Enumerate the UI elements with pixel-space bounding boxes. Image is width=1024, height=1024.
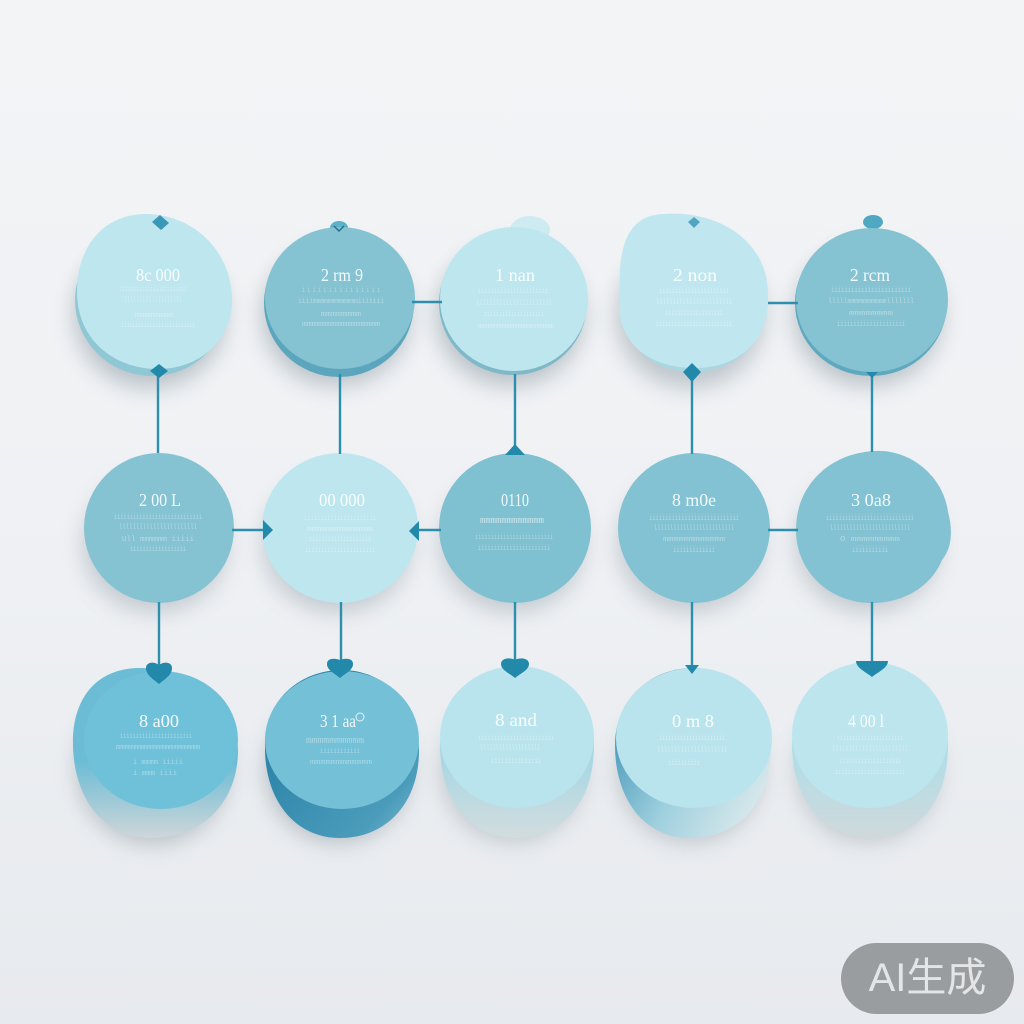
- node: row 1 column 3: iiiiiiiiiiiiiiiiiiiiii: [478, 288, 548, 296]
- node: row 1 column 3: 1 nan: [495, 265, 535, 285]
- node: row 1 column 2: [262, 221, 415, 386]
- node: row 2 column 1: lllllllllllllllllllllll: [119, 524, 197, 532]
- node: row 1 column 4: iiiiiiiiiiiiiiiiiiiiiiiii: [656, 321, 732, 329]
- node: row 2 column 4: iiiiiiiiiiiii: [673, 547, 715, 555]
- arrow: row 1 column 5 down: [866, 372, 878, 452]
- node: row 1 column 4: lllllllllllllllllllllll: [656, 299, 732, 307]
- arrow: row 1 column 2 down: [339, 374, 341, 454]
- node: row 1 column 5: [794, 215, 948, 386]
- node: row 1 column 5: mmmmmmmm: [849, 310, 893, 318]
- node: row 1 column 3: iiiiiiiiiiiiiiiiiiii: [484, 311, 544, 319]
- node: row 2 column 1: Ull mmmmmm iiiii: [122, 536, 194, 544]
- node: row 3 column 5: iiiiiiiiiiiiiiiiiiii: [839, 758, 901, 766]
- arrow: row 2 column 4 to 5: [768, 529, 798, 531]
- node: row 3 column 5: iiiiiiiiiiiiiiiiiiiiii: [835, 769, 905, 777]
- node: row 3 column 3: lllllllllllllllllll: [480, 745, 540, 753]
- node: row 3 column 5: 4 00 l: [848, 711, 884, 731]
- node: row 3 column 4: iiiiiiiiiiiiiiiiiiiiii: [659, 735, 725, 743]
- connector lines and arrows: [146, 215, 888, 684]
- node: row 3 column 4: 0 m 8: [672, 711, 714, 731]
- node: row 2 column 2: iiiiiiiiiiiiiiiiiiiiii: [305, 547, 375, 555]
- node: row 3 column 3: [440, 666, 594, 842]
- arrow: row 1 column 1 top marker: [152, 215, 169, 230]
- node: row 1 column 5: lllllmmmmmmmmmmlllllll: [828, 298, 914, 306]
- node: row 1 column 2: iiiimmmmmmmmmmmmiiiiiii: [298, 298, 384, 306]
- node: row 3 column 1: mmmmmmmmmmmmmmmmmmm: [116, 744, 200, 752]
- node: row 2 column 3: iiiiiiiiiiiiiiiiiiiiiiiii: [475, 534, 553, 542]
- node: row 1 column 4: iiiiiiiiiiiiiiiiiii: [665, 310, 723, 318]
- node: row 2 column 2: iiiiiiiiiiiiiiiiiiiiii: [304, 515, 376, 523]
- node: row 1 column 1: 8c 000: [136, 265, 180, 285]
- node: row 3 column 2: [265, 670, 419, 842]
- node: row 1 column 3: mmmmmmmmmmmmmmmm: [478, 323, 554, 331]
- watermark badge: AI生成: [841, 943, 1014, 1014]
- arrow: row 1 column 2 to 3: [412, 301, 442, 303]
- node: row 2 column 4: [618, 453, 770, 612]
- node: row 1 column 1: iiiiiiiiiiiiiiiiiiiiiiii: [119, 286, 187, 294]
- node: row 2 column 5: iiiiiiiiiii: [852, 547, 888, 555]
- node: row 3 column 4: lllllllllllllllllllll: [657, 747, 727, 755]
- node: row 1 column 5: iiiiiiiiiiiiiiiiiiiiiiii: [831, 287, 911, 295]
- arrow: row 1 column 4 down: [683, 363, 701, 454]
- arrow: row 1 column 4 top marker: [688, 217, 700, 228]
- node: row 3 column 1: iiiiiiiiiiiiiiiiiiiiiii: [120, 733, 192, 741]
- node: row 1 column 4: [616, 214, 768, 388]
- node: row 2 column 4: iiiiiiiiiiiiiiiiiiiiiiiiiiii: [649, 515, 739, 523]
- node: row 3 column 5: iiiiiiiiiiiiiiiiiiiiii: [837, 735, 903, 743]
- node: row 1 column 2: mmmmmmmm: [321, 311, 361, 319]
- node: row 2 column 4: 8 m0e: [672, 490, 716, 510]
- node: row 3 column 3: 8 and: [495, 710, 537, 730]
- arrow: row 2 column 1 down: [146, 602, 172, 684]
- node: row 3 column 3: iiiiiiiiiiiiiii: [491, 758, 541, 766]
- node: row 1 column 5: 2 rcm: [850, 265, 890, 285]
- node: row 2 column 5: iiiiiiiiiiiiiiiiiiiiiiiiiiii: [826, 515, 914, 523]
- node: row 2 column 1: iiiiiiiiiiiiiiiiiiiiiiiiiiii: [114, 514, 202, 522]
- node: row 2 column 3: iiiiiiiiiiiiiiiiiiiiiii: [478, 545, 550, 553]
- node: row 1 column 3: lllllllllllllllllllllll: [476, 300, 552, 308]
- node: row 1 column 2: 2 rm 9: [321, 265, 363, 285]
- arrow: row 1 column 4 to 5: [768, 302, 798, 304]
- node: row 2 column 3: [439, 453, 591, 612]
- node: row 1 column 1: [74, 214, 232, 388]
- node: row 2 column 2: mmmmmmmmmmmmmm: [307, 526, 373, 534]
- node: row 2 column 3: 0110: [501, 490, 529, 510]
- node: row 3 column 5: lllllllllllllllllllllll: [832, 746, 908, 754]
- node: row 2 column 5: [796, 451, 951, 612]
- node: row 2 column 2: iiiiiiiiiiiiiiiiiiii: [309, 536, 371, 544]
- arrow: row 2 column 2 down: [327, 602, 353, 678]
- node: row 3 column 1: 8 a00: [139, 711, 179, 731]
- node: row 1 column 4: 2 non: [673, 265, 717, 285]
- arrow: row 2 column 5 down: [856, 602, 888, 677]
- node: row 1 column 1: mmmmmmmm: [135, 312, 173, 320]
- node: row 2 column 1: iiiiiiiiiiiiiiiiii: [130, 546, 186, 554]
- node: row 2 column 1: 2 00 L: [139, 490, 181, 510]
- node: row 1 column 1: iiiiiiiiiiiiiiiiiiiiiiiiii: [121, 322, 195, 330]
- node: row 1 column 2: i i i i i i i i i i i i i i i: [302, 287, 380, 295]
- arrow: row 1 column 1 down: [150, 364, 168, 453]
- node: row 2 column 5: lllllllllllllllllllllllll: [830, 525, 910, 533]
- node: row 3 column 2: mmmmmmmmmmmm: [310, 759, 372, 767]
- node: row 2 column 3: mmmmmmmmmmmm: [480, 516, 544, 526]
- node: row 2 column 2: 00 000: [319, 490, 365, 510]
- node: row 2 column 1: [83, 453, 234, 612]
- node: row 3 column 2: 3 1 aa: [320, 711, 356, 731]
- node: row 2 column 5: O mmmmmmmmm: [840, 536, 900, 544]
- node: row 3 column 2: iiiiiiiiiiii: [320, 748, 360, 756]
- node: row 1 column 1: lllllllllllllllllll: [124, 297, 182, 305]
- node: row 3 column 4: [615, 668, 772, 842]
- arrow: row 2 column 1 to 2: [232, 520, 273, 540]
- node: row 3 column 2: mmmmmmmmmm: [306, 736, 364, 746]
- node: row 1 column 5: iiiiiiiiiiiiiiiiiiiii: [837, 321, 905, 329]
- node: row 3 column 3: iiiiiiiiiiiiiiiiiiiiiiii: [478, 735, 554, 743]
- node: row 2 column 4: mmmmmmmmmmmm: [663, 536, 725, 544]
- node: row 2 column 5: 3 0a8: [851, 490, 891, 510]
- arrow: row 2 column 4 down: [685, 602, 699, 674]
- arrow: row 1 column 3 down: [505, 374, 525, 455]
- arrow: row 2 column 3 down: [501, 602, 529, 678]
- node: row 2 column 2: [262, 453, 418, 612]
- node: row 2 column 4: lllllllllllllllllllllllll: [654, 525, 734, 533]
- watermark badge: AI生成: AI生成: [869, 956, 986, 1000]
- node: row 3 column 1: [73, 668, 238, 844]
- node: row 3 column 1: i mmm iiii: [133, 770, 177, 778]
- node: row 1 column 4: iiiiiiiiiiiiiiiiiiiiii: [659, 288, 729, 296]
- node: row 3 column 4: iiiiiiiiii: [668, 760, 700, 768]
- node: row 1 column 3: [436, 216, 588, 386]
- node: row 3 column 1: i mmmm iiiii: [133, 759, 183, 767]
- node: row 1 column 2: mmmmmmmmmmmmmmmm: [302, 321, 380, 329]
- arrow: row 2 column 3 to 2: [409, 521, 441, 541]
- node: row 3 column 5: [792, 662, 948, 842]
